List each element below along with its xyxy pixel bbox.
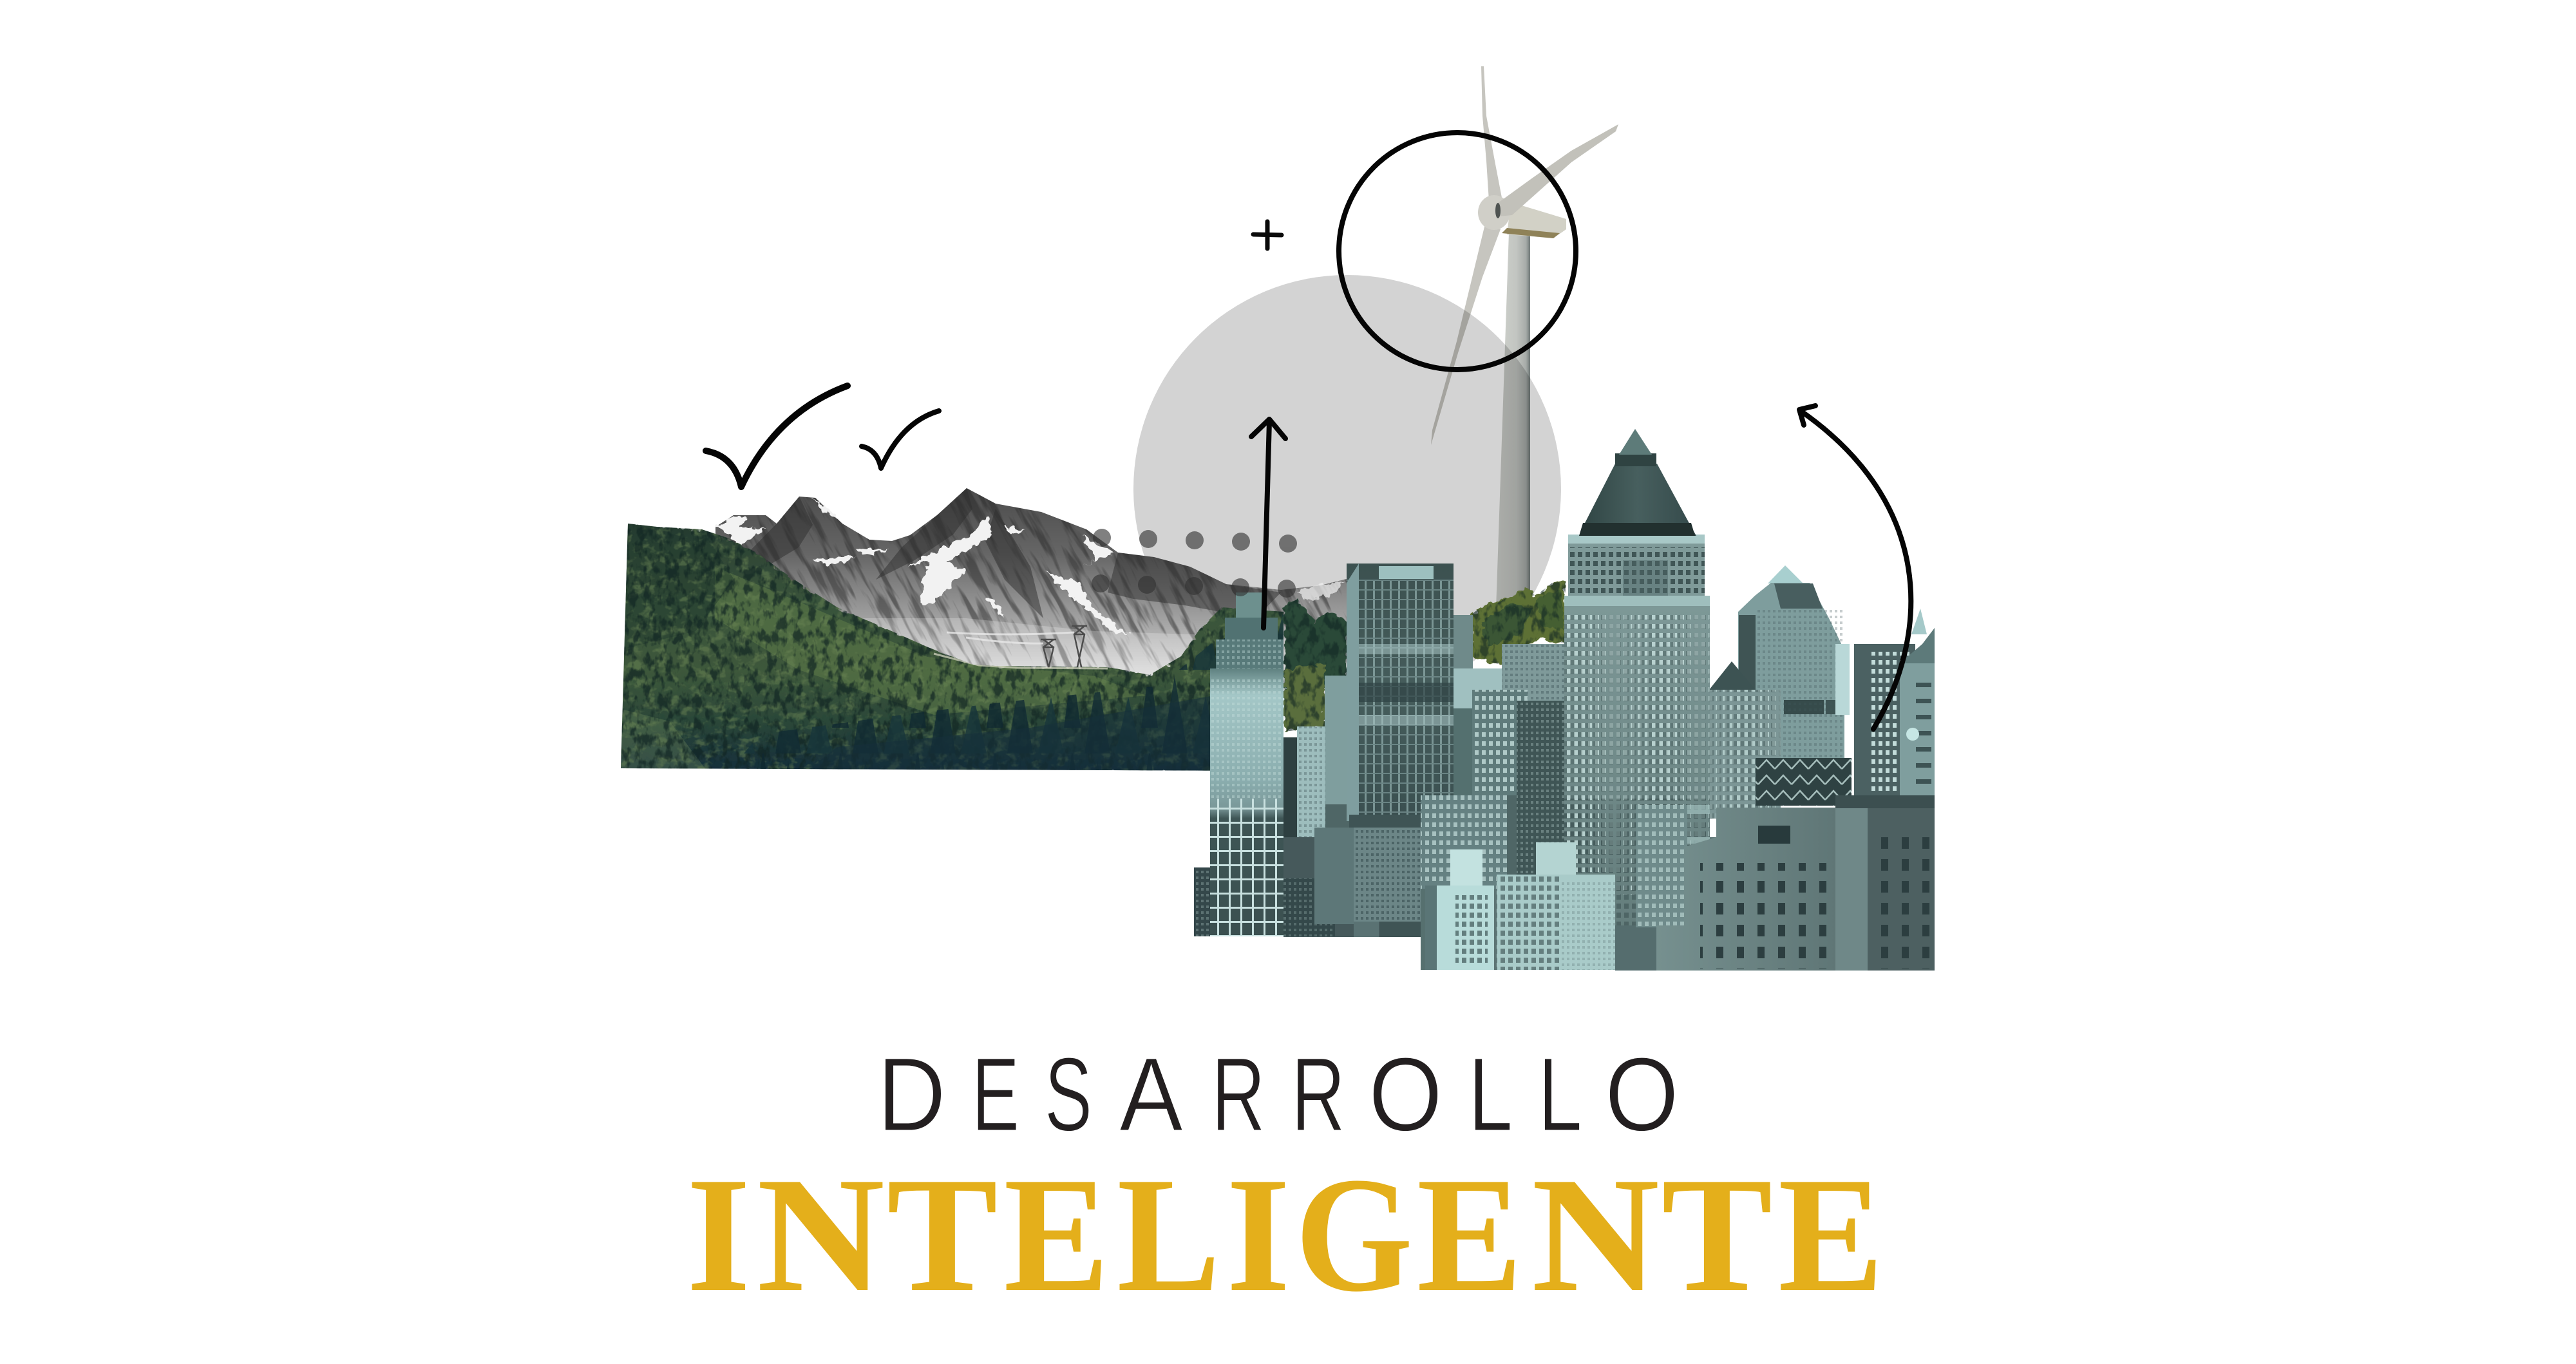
turbine nacelle (1507, 202, 1566, 238)
mountains (621, 488, 1347, 771)
forest behind buildings (1282, 580, 1568, 734)
tower cone roof (1579, 464, 1696, 536)
city skyline (1194, 429, 1935, 971)
title: INTELIGENTE: E (1778, 1144, 1884, 1326)
forest: between left towers (1283, 599, 1347, 732)
forest: base of turbine (1472, 582, 1566, 665)
big check mark (706, 386, 848, 487)
title: INTELIGENTE: N (757, 1144, 885, 1326)
title: INTELIGENTE: I (687, 1144, 751, 1326)
buildings: lower pale front (1425, 805, 1687, 971)
title: INTELIGENTE: E (1003, 1144, 1109, 1326)
power pylons and lines (1041, 626, 1087, 676)
building: left front tower (1194, 592, 1283, 936)
turbine upper and lower blades (1431, 66, 1502, 445)
building: chevron facade (1756, 758, 1852, 806)
building: mid background centre (1452, 615, 1564, 881)
building: mid background left (1283, 676, 1355, 881)
title: INTELIGENTE: N (1531, 1144, 1660, 1326)
dotted grid (1092, 529, 1297, 598)
title: DESARROLLO: O (1605, 1036, 1679, 1153)
lower dark conifers (728, 612, 1288, 773)
title: INTELIGENTE: T (887, 1144, 998, 1326)
building: far right towers (1854, 609, 1935, 799)
plus sign (1253, 222, 1282, 249)
curved arrow (1799, 406, 1911, 729)
rock streaks (723, 488, 1347, 683)
building: base fill (1421, 837, 1935, 970)
title: DESARROLLO: S (1045, 1036, 1092, 1153)
building: big dark banded tower (1347, 564, 1459, 937)
title: INTELIGENTE: T (1662, 1144, 1772, 1326)
hillside lighter band (715, 567, 1146, 715)
building: short tower with dark cone (1684, 661, 1781, 819)
title: DESARROLLO: L (1538, 1036, 1582, 1153)
building: right background tower (1738, 565, 1850, 799)
turbine right blade (1495, 124, 1618, 216)
turbine tower (1496, 232, 1530, 609)
wind turbine (1431, 66, 1618, 609)
title: INTELIGENTE: L (1117, 1144, 1220, 1326)
title: INTELIGENTE: E (1417, 1144, 1522, 1326)
title: DESARROLLO: R (1211, 1036, 1265, 1153)
small check mark (862, 411, 939, 468)
black outline circle (1339, 133, 1576, 370)
building: large front right block (1656, 795, 1935, 971)
title: DESARROLLO: O (1368, 1036, 1443, 1153)
title: DESARROLLO: D (877, 1036, 946, 1153)
grey circle (1133, 275, 1561, 703)
title: DESARROLLO: A (1119, 1036, 1183, 1153)
dark rock faces (747, 488, 1281, 618)
snow patches (715, 497, 1343, 635)
road on the hillside (886, 628, 1108, 668)
title: INTELIGENTE: G (1295, 1144, 1413, 1326)
building: main conical tower (1564, 429, 1710, 931)
title: INTELIGENTE: I (1226, 1144, 1291, 1326)
forest (612, 515, 1288, 773)
turbine hub (1478, 195, 1510, 230)
title: DESARROLLO: L (1468, 1036, 1513, 1153)
title: DESARROLLO: R (1291, 1036, 1345, 1153)
title: DESARROLLO: E (972, 1036, 1019, 1153)
buildings: lower midground (1283, 795, 1507, 970)
upward arrow (1251, 419, 1285, 628)
